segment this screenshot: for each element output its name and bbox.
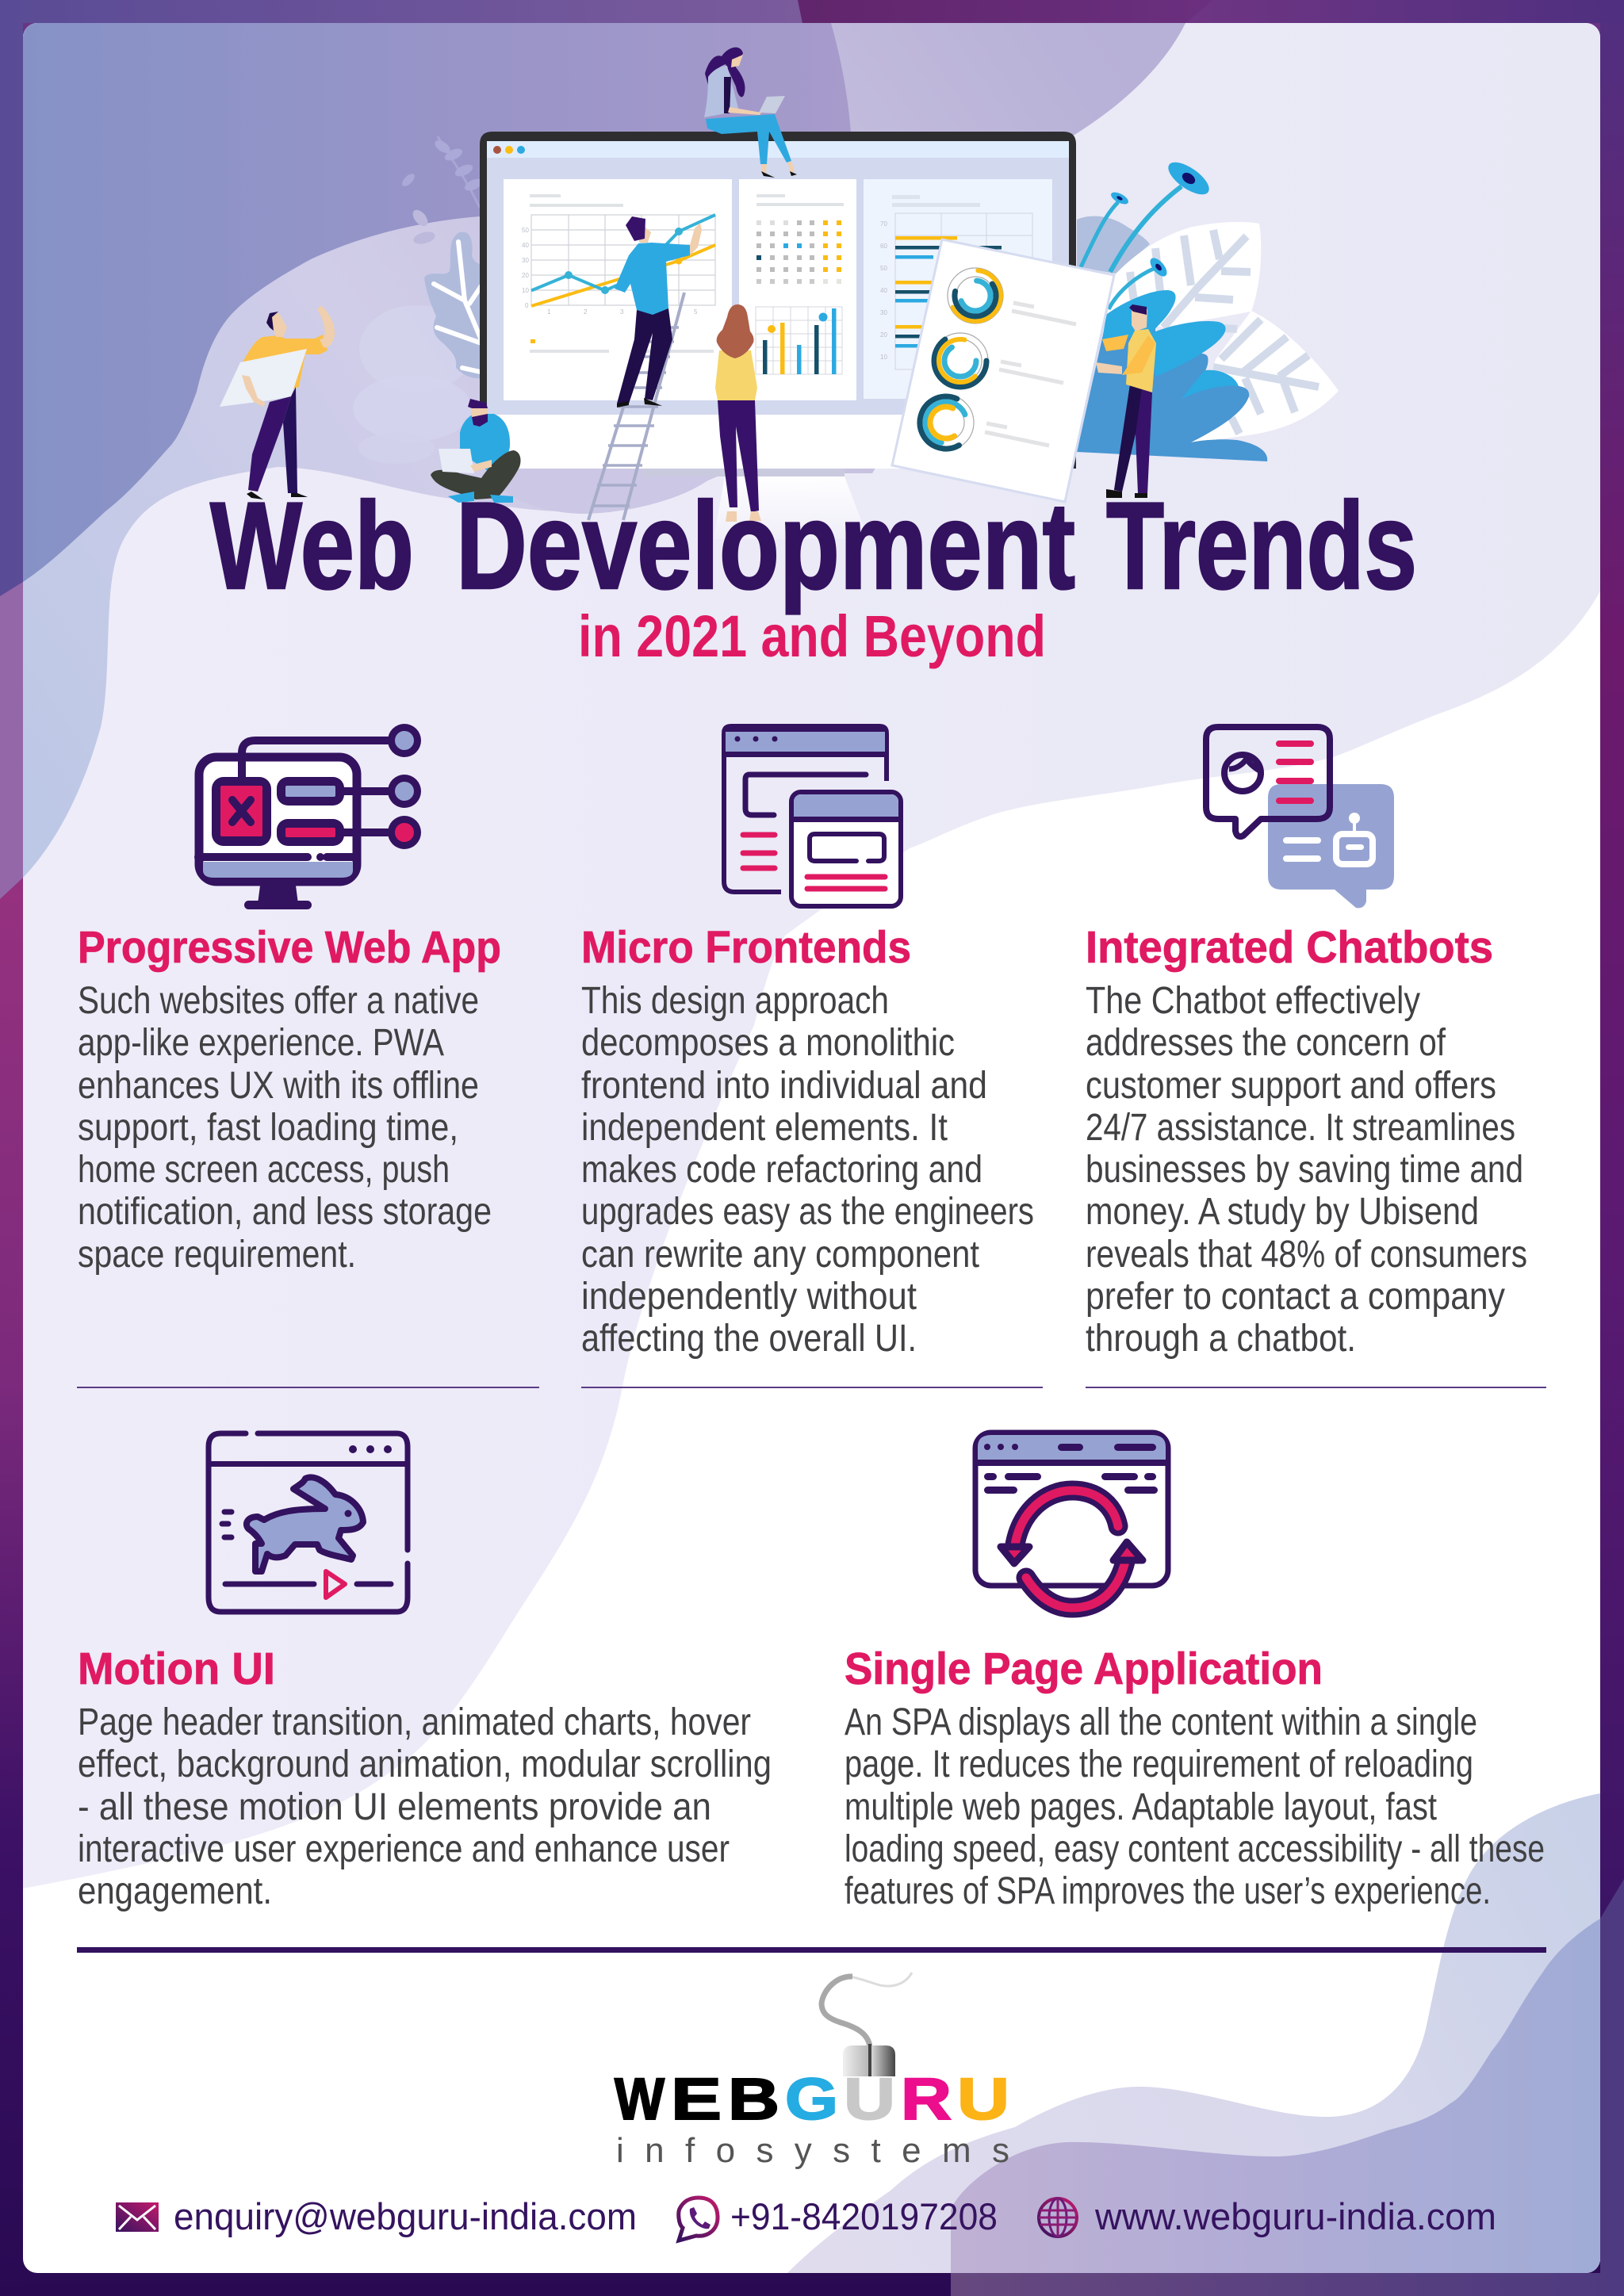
body text: effect, background animation, modular scrolling: [78, 1743, 772, 1785]
icon: integrated chatbots: [1206, 727, 1394, 908]
icon: globe: [1039, 2198, 1077, 2237]
body text: multiple web pages. Adaptable layout, fast: [845, 1786, 1437, 1828]
line chart: 50: [522, 227, 529, 234]
section: integrated chatbots: [1086, 922, 1527, 1360]
line chart: [522, 194, 715, 353]
person: woman from behind: [715, 304, 761, 522]
subtitle: in 2021 and Beyond: [578, 603, 1046, 669]
line chart: 10: [522, 287, 529, 294]
person: sitting man with laptop: [431, 399, 521, 503]
left foliage: [353, 136, 485, 464]
logo: webguru infosystems: R: [901, 2066, 952, 2132]
heading: Motion UI: [78, 1644, 275, 1694]
body text: [845, 1701, 1545, 1912]
right foliage: [1077, 156, 1339, 461]
horizontal bars chart: 30: [880, 309, 887, 316]
body text: affecting the overall UI.: [581, 1318, 917, 1360]
section: micro frontends: [581, 922, 1034, 1360]
body text: notification, and less storage: [78, 1191, 492, 1233]
horizontal bars chart: 70: [880, 220, 887, 228]
line chart: 40: [522, 242, 529, 249]
body text: - all these motion UI elements provide an: [78, 1786, 711, 1828]
body text: The Chatbot effectively: [1086, 980, 1420, 1022]
icon: motion ui: [208, 1433, 408, 1612]
heading: Micro Frontends: [581, 922, 911, 973]
hero illustration: [220, 48, 1339, 539]
body text: [581, 980, 1034, 1360]
heading: Integrated Chatbots: [1086, 922, 1493, 973]
horizontal bars chart: 20: [880, 331, 887, 339]
body text: page. It reduces the requirement of reloading: [845, 1743, 1473, 1785]
title: Web: [210, 477, 414, 615]
monitor: [480, 132, 1076, 476]
icon: single page application: [975, 1433, 1168, 1608]
body text: decomposes a monolithic: [581, 1022, 955, 1064]
body text: 24/7 assistance. It streamlines: [1086, 1107, 1515, 1149]
body text: businesses by saving time and: [1086, 1149, 1523, 1191]
logo: webguru infosystems: W: [615, 2066, 665, 2132]
line chart: 3: [620, 308, 624, 316]
logo: webguru infosystems: E: [671, 2066, 722, 2132]
contact: email: enquiry@webguru-india.com: [174, 2195, 637, 2237]
horizontal bars chart: 40: [880, 287, 887, 294]
icon: progressive web app: [198, 724, 421, 909]
body text: app-like experience. PWA: [78, 1022, 444, 1064]
body text: prefer to contact a company: [1086, 1276, 1505, 1318]
person: man right holding document: [1096, 304, 1156, 498]
body text: home screen access, push: [78, 1149, 450, 1191]
line chart: 0: [525, 302, 529, 309]
logo: webguru infosystems: [615, 1973, 1009, 2170]
body text: [78, 980, 492, 1276]
monitor shadow: [486, 469, 722, 514]
ladder: [588, 293, 684, 520]
line chart: 2: [584, 308, 588, 316]
line chart: 20: [522, 272, 529, 279]
body text: support, fast loading time,: [78, 1107, 458, 1149]
body text: can rewrite any component: [581, 1234, 979, 1276]
person: woman on top with laptop: [704, 48, 797, 178]
body text: customer support and offers: [1086, 1065, 1496, 1107]
bar chart: [756, 307, 842, 374]
body text: [1086, 980, 1527, 1360]
document with donut charts: [892, 239, 1114, 502]
contact: phone: +91-8420197208: [730, 2195, 998, 2237]
body text: addresses the concern of: [1086, 1022, 1446, 1064]
horizontal bars chart: 50: [880, 265, 887, 272]
body text: reveals that 48% of consumers: [1086, 1234, 1527, 1276]
section: progressive web app: [78, 922, 501, 1276]
section: motion ui: [78, 1644, 772, 1912]
body text: Page header transition, animated charts, hover: [78, 1701, 751, 1743]
section: single page application: [845, 1644, 1545, 1912]
body text: This design approach: [581, 980, 889, 1022]
body text: money. A study by Ubisend: [1086, 1191, 1479, 1233]
body text: makes code refactoring and: [581, 1149, 982, 1191]
title: Development: [456, 477, 1075, 615]
logo: webguru infosystems: U: [844, 2066, 895, 2132]
body text: [78, 1701, 772, 1912]
body text: independent elements. It: [581, 1107, 948, 1149]
body text: space requirement.: [78, 1234, 356, 1276]
logo: webguru infosystems: U: [957, 2066, 1009, 2132]
icon: envelope: [116, 2202, 159, 2232]
line chart: 1: [547, 308, 551, 316]
logo: webguru infosystems: B: [728, 2066, 779, 2132]
body text: engagement.: [78, 1870, 272, 1912]
body text: frontend into individual and: [581, 1065, 987, 1107]
line chart: 30: [522, 257, 529, 264]
horizontal bars chart: 10: [880, 354, 887, 361]
heading: Single Page Application: [845, 1644, 1323, 1694]
logo: webguru infosystems: G: [785, 2066, 838, 2132]
dot matrix: [756, 194, 844, 284]
body text: independently without: [581, 1276, 917, 1318]
title: [210, 477, 1417, 615]
heading: Progressive Web App: [78, 922, 501, 973]
line chart: 5: [694, 308, 698, 316]
icon: micro frontends: [722, 724, 901, 906]
title: Trends: [1106, 477, 1417, 615]
monitor stand: [714, 476, 868, 539]
body text: An SPA displays all the content within a single: [845, 1701, 1477, 1743]
body text: interactive user experience and enhance user: [78, 1828, 730, 1870]
body text: enhances UX with its offline: [78, 1065, 479, 1107]
horizontal bars chart: 60: [880, 243, 887, 250]
icon: whatsapp: [679, 2198, 718, 2241]
horizontal bars chart: [880, 195, 1032, 369]
logo: webguru infosystems: infosystems: [616, 2131, 1009, 2170]
contact: website: www.webguru-india.com: [1094, 2195, 1496, 2237]
body text: upgrades easy as the engineers: [581, 1191, 1034, 1233]
body text: Such websites offer a native: [78, 980, 479, 1022]
person: man on ladder: [615, 216, 702, 408]
body text: through a chatbot.: [1086, 1318, 1356, 1360]
person: man left with paper: [220, 305, 335, 499]
